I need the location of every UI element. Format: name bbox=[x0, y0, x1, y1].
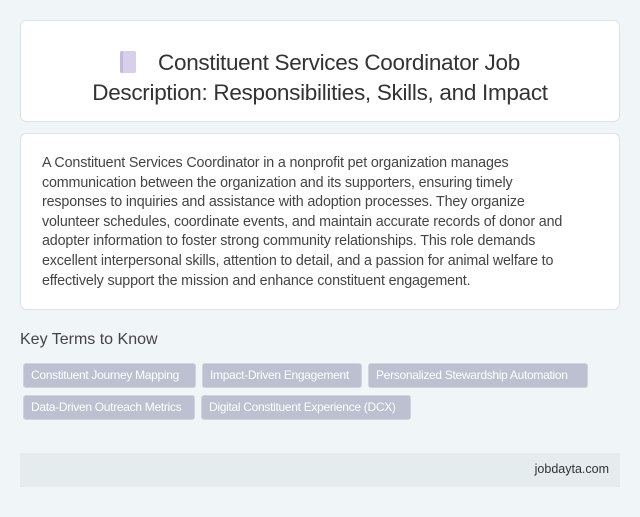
description text: excellent interpersonal skills, attention to detail, and a passion for animal welfare to bbox=[42, 253, 553, 269]
tag 3: Personalized Stewardship Automation bbox=[376, 368, 568, 382]
description text: communication between the organization and its supporters, ensuring timely bbox=[42, 175, 512, 191]
title: Constituent Services Coordinator Job bbox=[158, 50, 520, 75]
tag 3 bbox=[368, 363, 588, 388]
tag 4 bbox=[23, 395, 195, 420]
description text: volunteer schedules, coordinate events, and maintain accurate records of donor and bbox=[42, 214, 562, 230]
title: Description: Responsibilities, Skills, and Impact bbox=[92, 80, 548, 105]
description text: responses to inquiries and assistance with adoption processes. They organize bbox=[42, 194, 525, 210]
footer text: jobdayta.com bbox=[535, 462, 609, 476]
tag 1 bbox=[23, 363, 196, 388]
description text bbox=[42, 155, 562, 289]
description text: effectively support the mission and enhance constituent engagement. bbox=[42, 273, 470, 289]
tag 2 bbox=[202, 363, 362, 388]
icon: document bbox=[120, 51, 136, 73]
description text: A Constituent Services Coordinator in a nonprofit pet organization manages bbox=[42, 155, 509, 171]
title bbox=[92, 50, 548, 105]
tag 1: Constituent Journey Mapping bbox=[31, 368, 179, 382]
description card bbox=[20, 133, 620, 310]
tag 5: Digital Constituent Experience (DCX) bbox=[209, 400, 396, 414]
tag 2: Impact-Driven Engagement bbox=[210, 368, 349, 382]
header card bbox=[20, 20, 620, 122]
tag 4: Data-Driven Outreach Metrics bbox=[31, 400, 181, 414]
heading: key terms: Key Terms to Know bbox=[20, 331, 158, 348]
description text: adopter information to foster strong community relationships. This role demands bbox=[42, 233, 535, 249]
footer bbox=[20, 453, 620, 487]
tag 5 bbox=[201, 395, 411, 420]
